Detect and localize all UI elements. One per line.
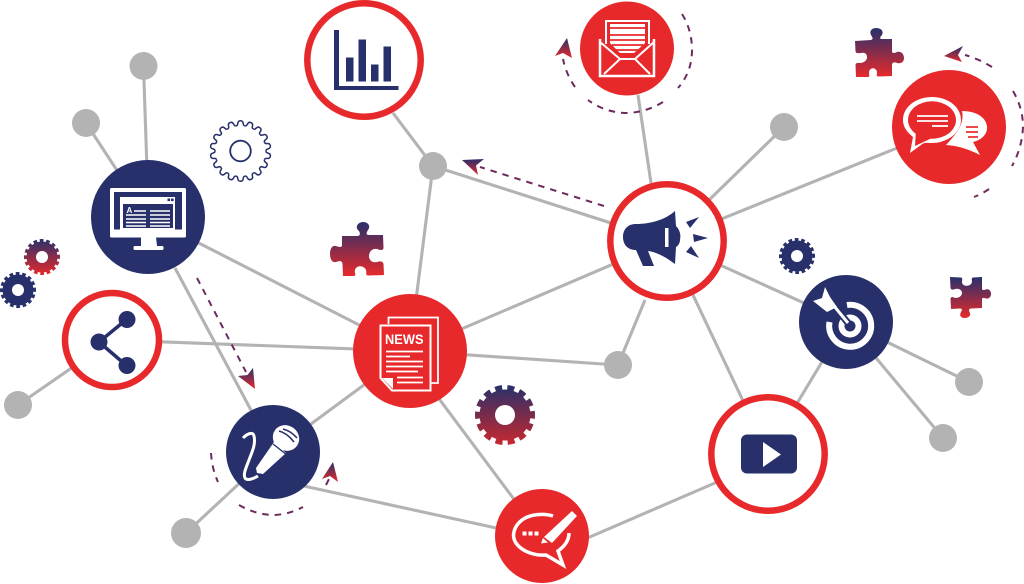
icon: target with arrow bbox=[813, 287, 871, 347]
node: megaphone bbox=[610, 184, 724, 298]
puzzle piece: top right bbox=[855, 28, 904, 77]
node: microphone bbox=[226, 405, 320, 499]
dashed arrows bbox=[197, 14, 1023, 515]
node: news bbox=[353, 294, 467, 408]
icon: speech bubbles bbox=[903, 97, 987, 155]
node: share bbox=[65, 293, 159, 387]
icon: envelope with letter bbox=[600, 21, 654, 76]
icon: newspaper pages: NEWS bbox=[385, 331, 424, 347]
icon: microphone bbox=[243, 420, 304, 479]
gear: large gradient bbox=[478, 388, 532, 442]
node: envelope bbox=[580, 2, 674, 96]
gear: outlined navy bbox=[210, 121, 271, 181]
puzzle piece: right bbox=[950, 277, 991, 318]
icon: play button bbox=[741, 434, 797, 474]
node: bar chart bbox=[307, 3, 421, 117]
gear: small gradient bbox=[26, 241, 58, 273]
arrow: around envelope bbox=[555, 14, 692, 113]
arrow: monitor to microphone bbox=[197, 278, 255, 389]
arrow: around chat bbox=[944, 46, 1023, 197]
icon: megaphone bbox=[623, 211, 708, 266]
gear: small navy right bbox=[781, 240, 813, 272]
puzzle piece: centre left bbox=[330, 222, 384, 276]
node: video play bbox=[711, 397, 825, 511]
arrow: around microphone bbox=[211, 453, 338, 515]
icon: bar chart bbox=[334, 30, 398, 90]
icon: share bbox=[90, 311, 136, 374]
gear: small navy left bbox=[2, 274, 34, 306]
node: monitor bbox=[91, 160, 205, 274]
node: pen comment bbox=[495, 489, 589, 583]
connector lines bbox=[18, 66, 969, 546]
icon: desktop monitor: A bbox=[126, 206, 132, 215]
node: target bbox=[799, 275, 893, 369]
arrow: megaphone to hub bbox=[462, 159, 604, 206]
icon: speech bubble with pencil bbox=[514, 511, 577, 565]
node: chat bbox=[892, 70, 1006, 184]
